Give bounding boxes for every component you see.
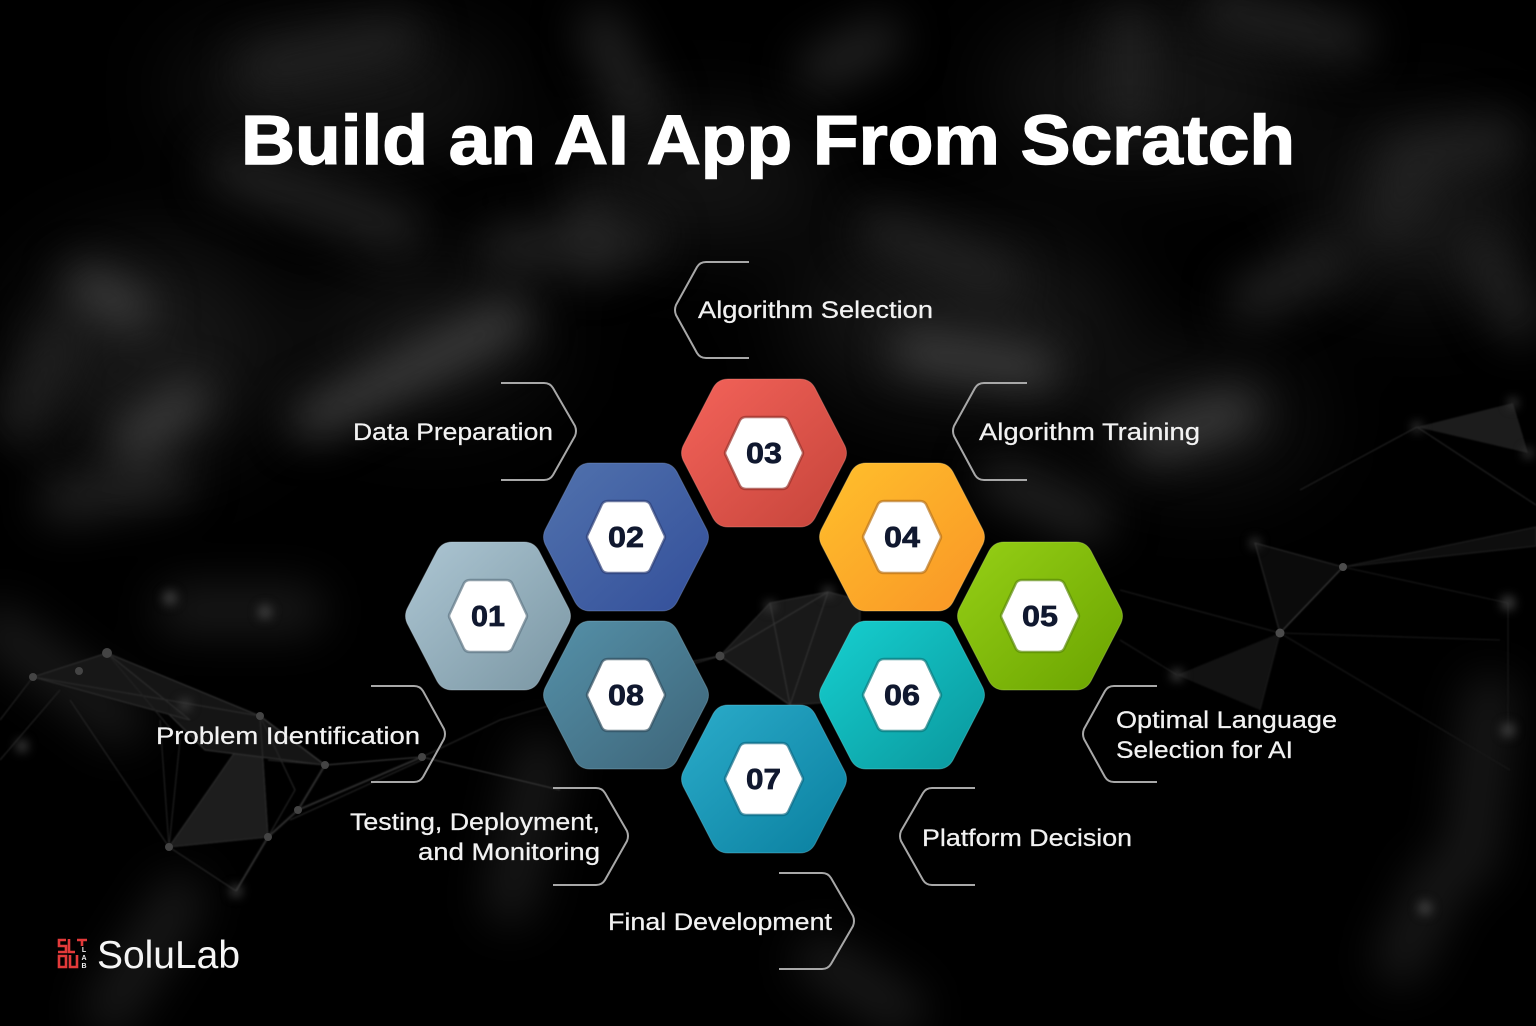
title: Build an AI App From Scratch [241,101,1295,179]
hexagon step 01: 01 [471,601,505,633]
hexagon step 02: 02 [608,522,644,554]
label: Problem Identification [156,686,445,782]
label: Testing, Deployment, and Monitoring: and Monitoring [418,839,600,866]
hexagon step 02 [544,463,708,611]
icon: SoluLab mark: A [81,955,87,962]
label: Optimal Language Selection for AI: Optimal Language [1116,707,1337,734]
network left [0,653,720,891]
label: Algorithm Selection: Algorithm Selection [698,297,933,324]
hexagon step 04 [820,463,984,611]
label: Testing, Deployment, and Monitoring [350,788,628,885]
label: Final Development [608,873,854,969]
label: Optimal Language Selection for AI: Selection for AI [1116,737,1293,764]
hexagon step 07: 07 [746,764,781,796]
label: Algorithm Selection [675,262,933,358]
hexagon step 03 [682,379,846,527]
label: Platform Decision: Platform Decision [922,825,1132,852]
label: Testing, Deployment, and Monitoring: Testing, Deployment, [350,809,600,836]
hexagon step 03: 03 [746,438,782,470]
hexagon step 06 [820,621,984,769]
label: Optimal Language Selection for AI [1083,686,1337,782]
label: Problem Identification: Problem Identification [156,723,420,750]
icon: SoluLab mark: L [82,947,87,954]
wide haze [20,20,1530,480]
hexagon step 08: 08 [608,680,644,712]
hexagon step 05: 05 [1022,601,1058,633]
logo: SoluLab: SoluLab [97,934,240,977]
hexagon step 05 [958,542,1122,690]
label: Platform Decision [900,788,1132,885]
hexagon step 04: 04 [884,522,920,554]
label: Algorithm Training: Algorithm Training [979,419,1200,446]
label: Data Preparation [353,383,576,480]
icon: SoluLab mark [58,939,87,970]
icon: SoluLab mark: B [81,963,87,970]
hexagon step 01 [406,542,570,690]
label: Algorithm Training [953,383,1200,480]
hexagon step 07 [682,705,846,853]
label: Final Development: Final Development [608,909,832,936]
network centre [660,592,860,705]
network right [1120,403,1536,770]
label: Data Preparation: Data Preparation [353,419,553,446]
hexagon step 08 [544,621,708,769]
hexagon step 06: 06 [884,680,920,712]
